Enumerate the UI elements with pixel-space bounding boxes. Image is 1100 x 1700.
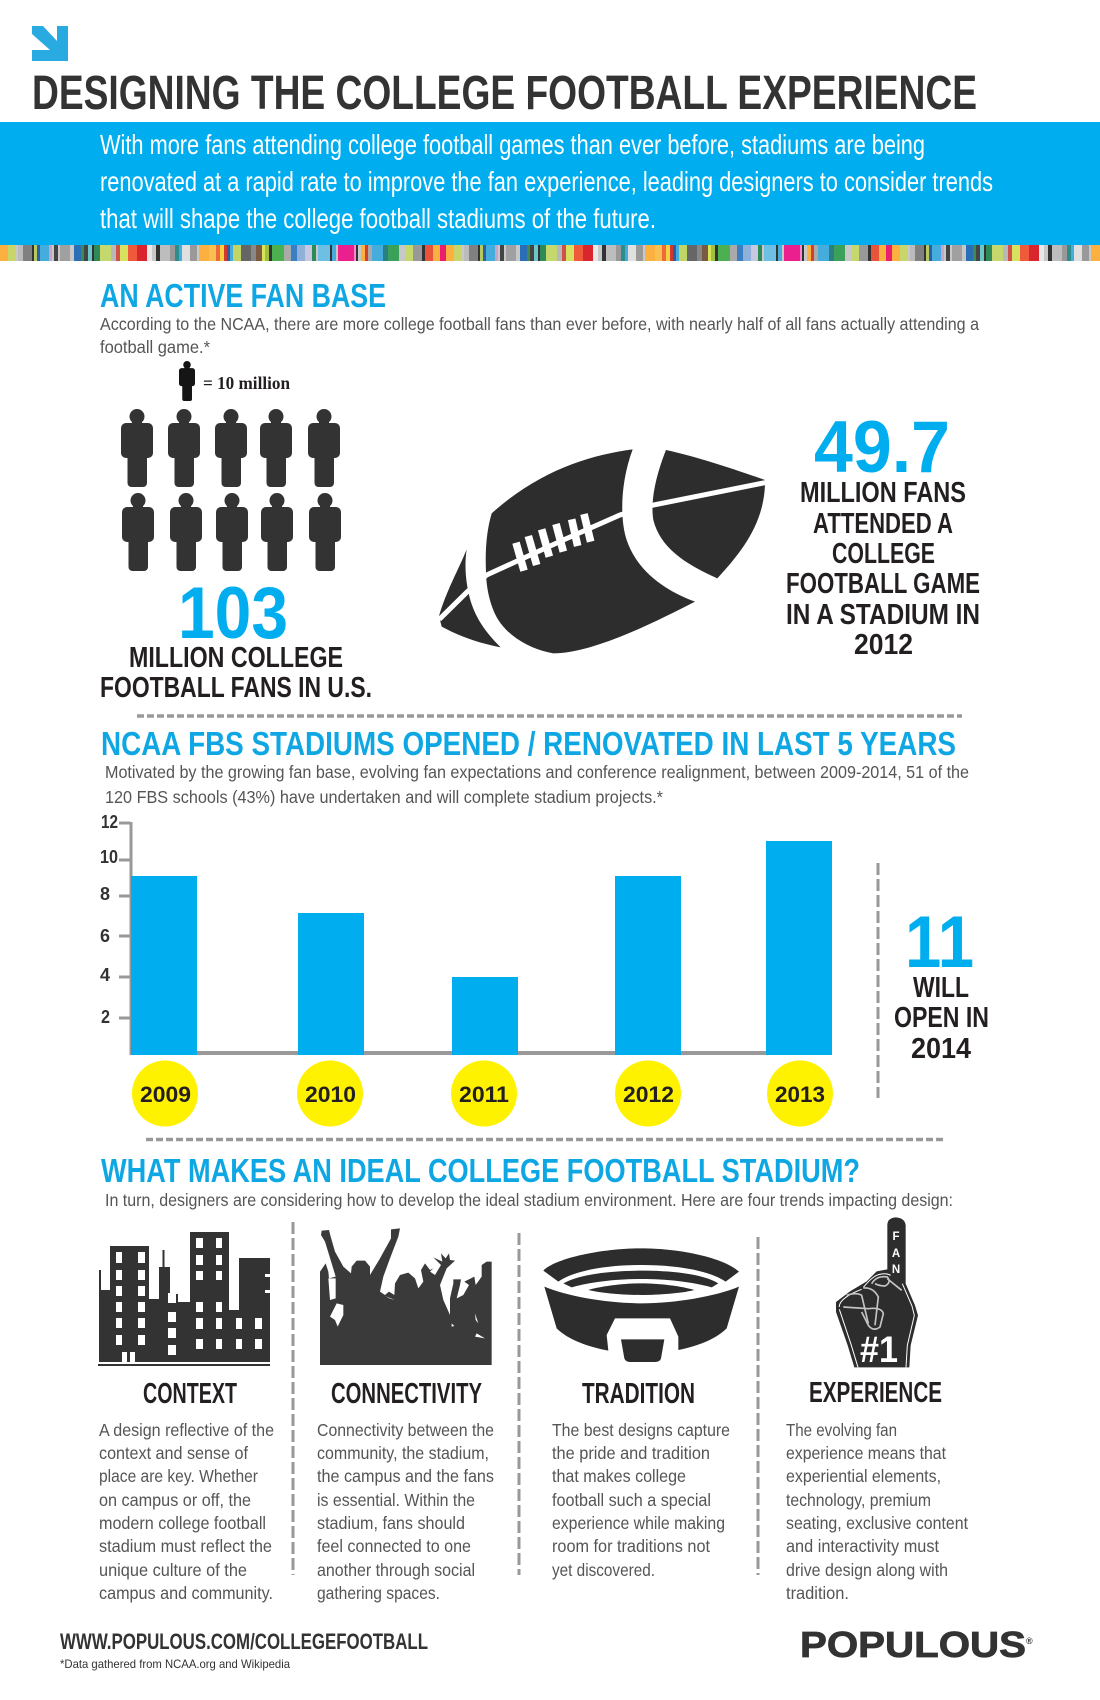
- stat: 49.7 million attended: ATTENDED A: [813, 508, 953, 540]
- stat: 11 will open in 2014: 11: [905, 902, 974, 983]
- text: tradition description: room for traditions not: [552, 1536, 710, 1556]
- bar chart: stadiums per year: 8: [100, 884, 110, 904]
- text: connectivity description: stadium, fans should: [317, 1513, 465, 1533]
- text: connectivity description: another through social: [317, 1560, 475, 1580]
- icon: foam finger: F: [892, 1231, 900, 1243]
- text: connectivity description: community, the stadium,: [317, 1443, 489, 1463]
- icon: football: [439, 449, 767, 653]
- label: connectivity: CONNECTIVITY: [331, 1378, 482, 1410]
- logo: Populous: ®: [1026, 1636, 1033, 1646]
- stat: 103 million fans: MILLION COLLEGE: [129, 642, 343, 674]
- legend: one person equals 10 million: [179, 361, 290, 401]
- year badges: 2010: [305, 1082, 356, 1107]
- panel: ideal stadium: [98, 1152, 968, 1603]
- column: context: [98, 1232, 274, 1603]
- intro banner: [0, 122, 1100, 245]
- text: context description: place are key. Whether: [99, 1466, 258, 1486]
- stat: 49.7 million attended: IN A STADIUM IN: [786, 599, 980, 631]
- text: ideal stadium intro: In turn, designers are considering how to develop the ideal stadium environment. Here are four trends impacting design:: [105, 1190, 953, 1210]
- stat: 103 million fans: 103: [178, 573, 288, 654]
- colour stripe band: [0, 245, 1100, 261]
- intro banner: that will shape the college football stadiums of the future.: [100, 203, 656, 234]
- bar chart: stadiums per year: 12: [101, 812, 118, 832]
- icon: foam finger: A: [892, 1248, 900, 1260]
- bar chart: stadiums per year: 10: [100, 847, 118, 867]
- text: experience description: tradition.: [786, 1583, 849, 1603]
- text: tradition description: The best designs capture: [552, 1420, 730, 1440]
- year badges: 2013: [775, 1082, 825, 1107]
- stat: 11 will open in 2014: OPEN IN: [894, 1002, 989, 1034]
- pictogram: ten people: [121, 409, 341, 571]
- text: connectivity description: [317, 1420, 494, 1603]
- text: stadium projects intro: [105, 762, 969, 807]
- text: experience description: drive design along with: [786, 1560, 948, 1580]
- bar chart: stadiums per year: 2: [101, 1007, 110, 1027]
- text: experience description: The evolving fan: [786, 1420, 897, 1440]
- heading: ideal stadium: WHAT MAKES AN IDEAL COLLEGE FOOTBALL STADIUM?: [101, 1152, 860, 1189]
- text: active fan base intro: [100, 314, 979, 357]
- text: tradition description: that makes college: [552, 1466, 686, 1486]
- text: context description: context and sense of: [99, 1443, 248, 1463]
- year badges: 2012: [623, 1082, 674, 1107]
- footnote: *Data gathered from NCAA.org and Wikipedia: [60, 1657, 290, 1671]
- stat: 49.7 million attended: COLLEGE: [832, 538, 935, 570]
- panel: stadium projects: [100, 725, 989, 1126]
- text: experience description: [786, 1420, 968, 1603]
- icon: stadium: [543, 1248, 739, 1362]
- text: stadium projects intro: Motivated by the growing fan base, evolving fan expectations and conference realignment, between 2009-2014, 51 of the: [105, 762, 969, 782]
- text: experience description: seating, exclusive content: [786, 1513, 968, 1533]
- column: connectivity: [317, 1228, 494, 1603]
- stat: 49.7 million attended: FOOTBALL GAME: [786, 568, 980, 600]
- text: context description: modern college football: [99, 1513, 266, 1533]
- icon: foam finger: N: [892, 1264, 900, 1276]
- text: connectivity description: the campus and the fans: [317, 1466, 494, 1486]
- stat: 11 will open in 2014: 2014: [911, 1033, 971, 1065]
- bar chart: stadiums per year: [100, 812, 833, 1126]
- text: tradition description: experience while making: [552, 1513, 725, 1533]
- text: tradition description: the pride and tradition: [552, 1443, 710, 1463]
- text: active fan base intro: football game.*: [100, 337, 210, 357]
- text: context description: stadium must reflect the: [99, 1536, 272, 1556]
- year badges: [132, 1060, 833, 1126]
- stat: 49.7 million attended: 49.7: [814, 407, 950, 488]
- text: connectivity description: feel connected to one: [317, 1536, 471, 1556]
- icon: foam finger: #1: [860, 1329, 898, 1370]
- text: experience description: experiential elements,: [786, 1466, 941, 1486]
- legend: one person equals 10 million: = 10 million: [203, 373, 290, 393]
- text: context description: on campus or off, the: [99, 1490, 251, 1510]
- text: connectivity description: is essential. Within the: [317, 1490, 475, 1510]
- text: tradition description: [552, 1420, 730, 1580]
- text: tradition description: yet discovered.: [552, 1560, 655, 1580]
- text: experience description: experience means that: [786, 1443, 946, 1463]
- panel: active fan base: [100, 277, 980, 704]
- stat: 103 million fans: FOOTBALL FANS IN U.S.: [100, 672, 372, 704]
- text: tradition description: football such a special: [552, 1490, 711, 1510]
- stat: 11 will open in 2014: [894, 902, 989, 1065]
- column: experience: [786, 1217, 968, 1603]
- text: context description: [99, 1420, 274, 1603]
- stat: 49.7 million attended: MILLION FANS: [800, 477, 966, 509]
- text: connectivity description: Connectivity between the: [317, 1420, 494, 1440]
- heading: stadiums opened: NCAA FBS STADIUMS OPENED / RENOVATED IN LAST 5 YEARS: [101, 725, 956, 762]
- heading: active fan base: AN ACTIVE FAN BASE: [100, 277, 386, 314]
- logo: Populous: POPULOUS: [800, 1624, 1026, 1665]
- icon: city skyline: [98, 1232, 270, 1366]
- label: tradition: TRADITION: [582, 1378, 695, 1410]
- icon: foam finger: [836, 1217, 918, 1370]
- stat: 49.7 million attended: [786, 407, 980, 661]
- footer url: WWW.POPULOUS.COM/COLLEGEFOOTBALL: [60, 1629, 428, 1654]
- bar chart: stadiums per year: 6: [100, 926, 110, 946]
- text: context description: A design reflective of the: [99, 1420, 274, 1440]
- text: connectivity description: gathering spaces.: [317, 1583, 440, 1603]
- stat: 103 million fans: [100, 573, 372, 704]
- text: experience description: and interactivity must: [786, 1536, 939, 1556]
- bar chart: stadiums per year: 4: [100, 965, 110, 985]
- label: context: CONTEXT: [143, 1378, 237, 1410]
- text: experience description: technology, premium: [786, 1490, 931, 1510]
- icon: blue corner arrow: [32, 26, 68, 61]
- text: stadium projects intro: 120 FBS schools (43%) have undertaken and will complete stadium projects.*: [105, 787, 663, 807]
- stat: 49.7 million attended: 2012: [854, 629, 913, 661]
- text: context description: unique culture of the: [99, 1560, 247, 1580]
- label: experience: EXPERIENCE: [809, 1377, 942, 1409]
- icon: cheering crowd: [320, 1228, 492, 1365]
- year badges: 2009: [140, 1082, 191, 1107]
- text: context description: campus and community.: [99, 1583, 273, 1603]
- year badges: 2011: [459, 1082, 509, 1107]
- stat: 11 will open in 2014: WILL: [913, 972, 969, 1004]
- text: active fan base intro: According to the NCAA, there are more college football fans than ever before, with nearly half of all fans actually attending a: [100, 314, 979, 334]
- column: tradition: [543, 1248, 739, 1580]
